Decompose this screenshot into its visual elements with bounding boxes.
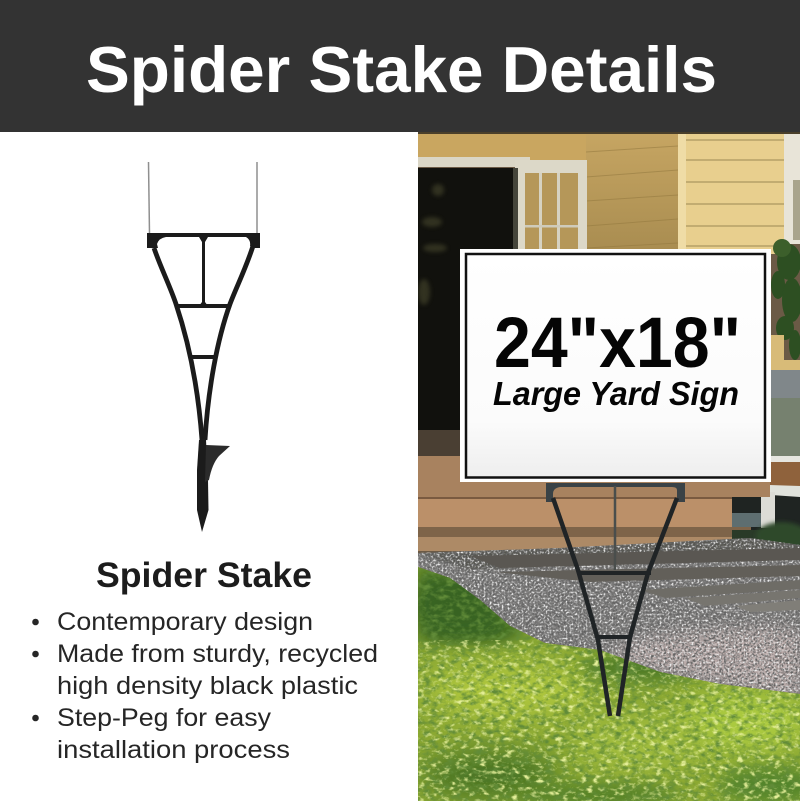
yard sign xyxy=(460,249,771,482)
grass lawn xyxy=(415,560,800,801)
bullet: sturdy recycled plastic: high density black plastic xyxy=(57,672,358,700)
sign size text: 24"x18" xyxy=(494,304,741,383)
foliage xyxy=(771,239,800,360)
spider stake product illustration xyxy=(147,162,260,532)
feature bullet list xyxy=(32,608,378,764)
left white panel xyxy=(0,132,418,801)
step peg xyxy=(205,445,230,482)
support wires xyxy=(148,162,257,234)
upper crossbar xyxy=(175,304,231,308)
ground spike xyxy=(197,440,208,532)
title banner xyxy=(0,0,800,132)
center rib xyxy=(199,237,208,306)
title: Spider Stake Details xyxy=(86,33,717,106)
sign caption: Large Yard Sign xyxy=(493,375,739,412)
house wall xyxy=(418,167,800,694)
top bar with end blocks xyxy=(147,233,260,248)
dark top edge of photo xyxy=(418,132,800,134)
bullet: sturdy recycled plastic: Made from sturdy, recycled xyxy=(57,640,378,668)
paving stones xyxy=(470,548,800,612)
bullet: contemporary design: Contemporary design xyxy=(57,608,313,636)
bright siding panel xyxy=(678,134,786,254)
wall corner shadow panel xyxy=(586,134,678,254)
porch shelf xyxy=(732,485,800,530)
bullet: step-peg installation: installation process xyxy=(57,736,290,764)
lower crossbar xyxy=(191,355,216,359)
lower right wall and window xyxy=(770,335,800,486)
bullet: step-peg installation: Step-Peg for easy xyxy=(57,704,272,732)
right window frame xyxy=(784,134,800,244)
bushes by the porch xyxy=(756,522,800,550)
gravel bed xyxy=(418,535,800,700)
bullet: step-peg installation xyxy=(32,704,290,764)
wooden porch steps xyxy=(418,430,800,551)
stake holding the sign xyxy=(546,483,685,716)
open door with panes xyxy=(513,160,587,252)
product name heading: Spider Stake xyxy=(96,556,312,595)
photo: yard sign in front of a house xyxy=(415,132,800,801)
right leg xyxy=(205,246,253,440)
upper left wall xyxy=(418,134,586,160)
dark doorway xyxy=(418,168,515,440)
left leg xyxy=(154,248,202,440)
door header trim xyxy=(418,157,530,167)
bullet: sturdy recycled plastic xyxy=(32,640,378,700)
